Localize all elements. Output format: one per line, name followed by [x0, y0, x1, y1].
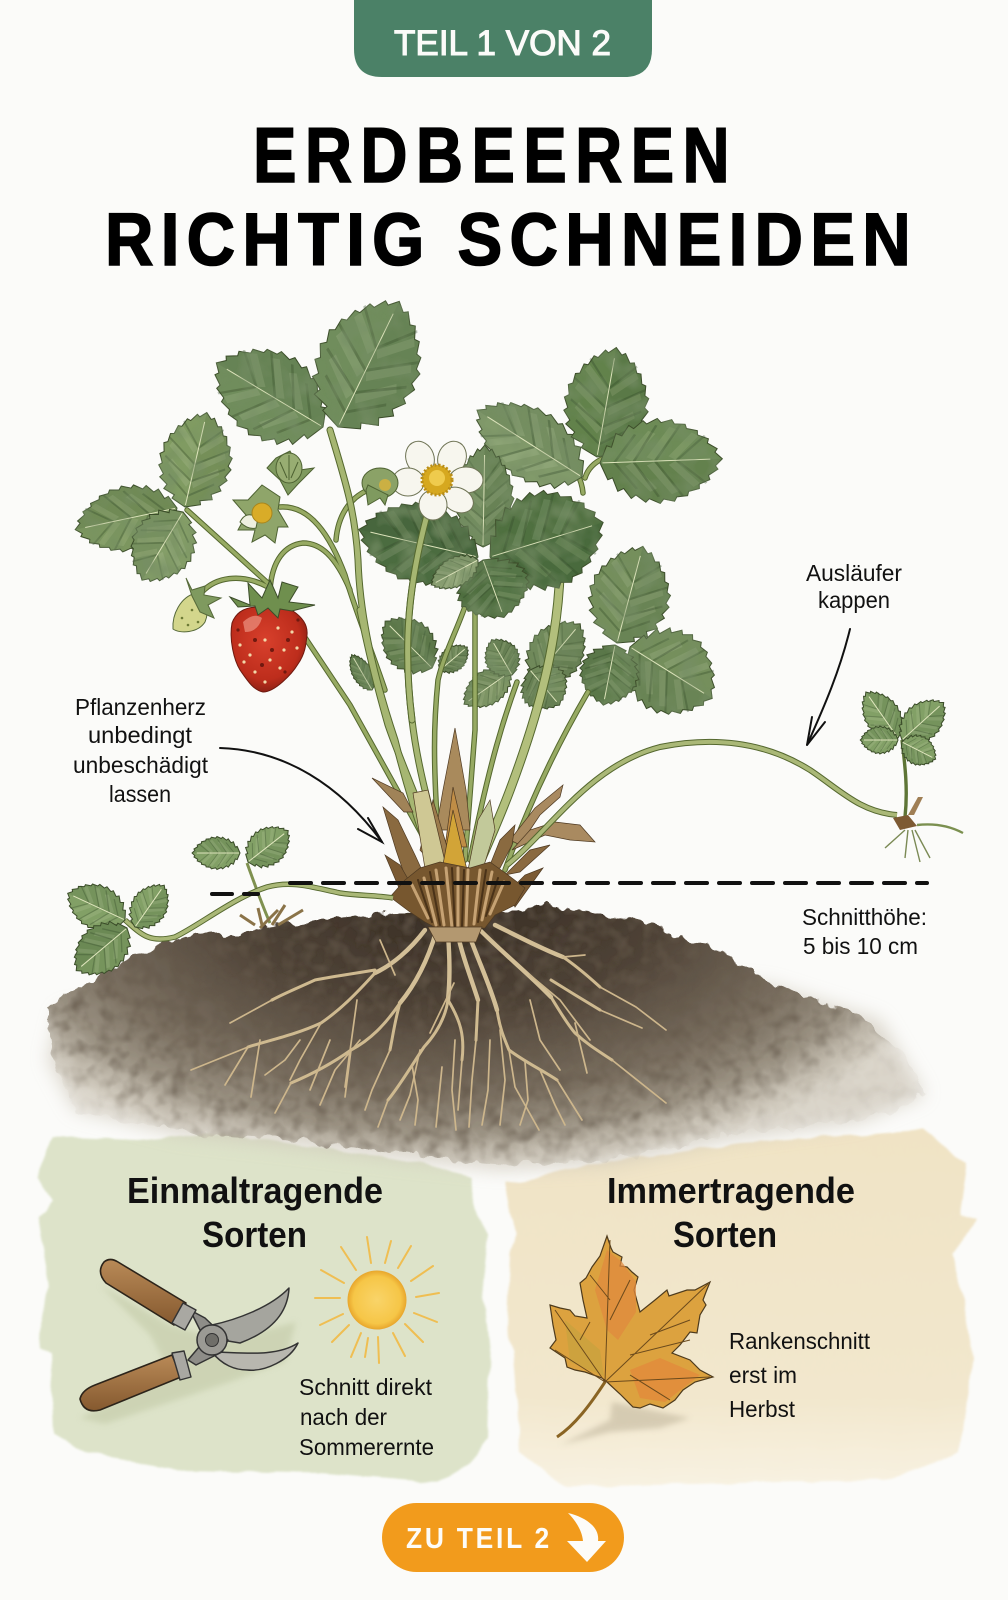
red strawberry [230, 580, 315, 692]
heading: Einmaltragende Sorten: Sorten [202, 1214, 307, 1255]
text: Rankenschnitt erst im Herbst [729, 1328, 870, 1422]
button: zu Teil 2: ZU TEIL 2 [406, 1523, 552, 1555]
open bud [233, 485, 288, 543]
callout: Ausläufer kappen [806, 560, 902, 745]
right runner with young plant [507, 682, 963, 865]
heading: Einmaltragende Sorten: Einmaltragende [127, 1170, 383, 1211]
soil mound [48, 905, 927, 1165]
roots [191, 925, 666, 1130]
text: Schnitt direkt nach der Sommerernte: nach der [300, 1404, 387, 1430]
title: ERDBEEREN [253, 111, 738, 199]
text: Rankenschnitt erst im Herbst: Herbst [729, 1396, 795, 1422]
heading: Immertragende Sorten: Sorten [673, 1214, 777, 1255]
cutting height dashed line [212, 883, 927, 894]
closed bud right [362, 468, 398, 505]
callout: Ausläufer kappen: kappen [818, 587, 890, 613]
icon: sun [315, 1237, 439, 1363]
title: RICHTIG SCHNEIDEN [105, 198, 918, 281]
lower blade [212, 1343, 298, 1370]
icon: autumn leaf [550, 1236, 713, 1445]
callout: Pflanzenherz: Pflanzenherz [75, 694, 206, 720]
tab: part 1 of 2: TEIL 1 VON 2 [394, 24, 611, 63]
callout: Schnitthöhe: Schnitthöhe: [802, 904, 927, 930]
callout: Pflanzenherz: unbedingt [88, 722, 192, 748]
leaf trio: left [68, 404, 242, 597]
leaf blade [550, 1236, 713, 1408]
lower handle [80, 1355, 181, 1411]
text: Schnitt direkt nach der Sommerernte: Schnitt direkt [299, 1374, 432, 1400]
collars [172, 1303, 196, 1330]
panel: Immertragende Sorten background [507, 1130, 977, 1487]
soil wash underlay [48, 960, 925, 1170]
stems [187, 430, 604, 870]
leaf shadow [560, 1402, 690, 1445]
arrow to runner [807, 629, 850, 745]
back small leaves [343, 603, 601, 721]
central leaves [350, 444, 618, 887]
green berry [173, 578, 221, 632]
text: Rankenschnitt erst im Herbst: Rankenschnitt [729, 1328, 870, 1354]
left runner with young plant [58, 816, 393, 989]
closed bud top [267, 451, 314, 495]
panel: Einmaltragende Sorten background [37, 1133, 490, 1483]
plant crown [372, 728, 595, 942]
leaf stem [557, 1382, 605, 1437]
callout: Pflanzenherz [73, 694, 382, 842]
callout: Ausläufer kappen: Ausläufer [806, 560, 902, 586]
shears shadow [80, 1285, 296, 1424]
text: Schnitt direkt nach der Sommerernte: Sommerernte [299, 1434, 434, 1460]
callout: Schnitthöhe: 5 bis 10 cm [803, 933, 918, 959]
strawberry plant [58, 278, 963, 989]
heading: Immertragende Sorten: Immertragende [607, 1170, 855, 1211]
callout: Pflanzenherz: lassen [109, 781, 171, 807]
upper blade [212, 1288, 289, 1343]
icon: pruning shears [80, 1260, 298, 1424]
title [105, 111, 918, 281]
text: Rankenschnitt erst im Herbst: erst im [729, 1362, 797, 1388]
flower [392, 437, 483, 520]
icon: curved down arrow [567, 1513, 606, 1562]
arrow to plant heart [220, 748, 382, 842]
upper handle [100, 1260, 186, 1325]
leaf trio: lower right [574, 536, 735, 735]
text: Schnitt direkt nach der Sommerernte [299, 1374, 434, 1460]
callout: Pflanzenherz: unbeschädigt [73, 752, 208, 778]
leaf trio: top pair [193, 278, 446, 466]
pivot [197, 1325, 227, 1355]
heading: Immertragende Sorten [607, 1170, 855, 1255]
callout: Schnitthöhe [802, 904, 927, 959]
heading: Einmaltragende Sorten [127, 1170, 383, 1255]
leaf trio: upper right [458, 340, 724, 507]
button: zu Teil 2 [382, 1503, 624, 1572]
tab: part 1 of 2 [354, 0, 652, 77]
